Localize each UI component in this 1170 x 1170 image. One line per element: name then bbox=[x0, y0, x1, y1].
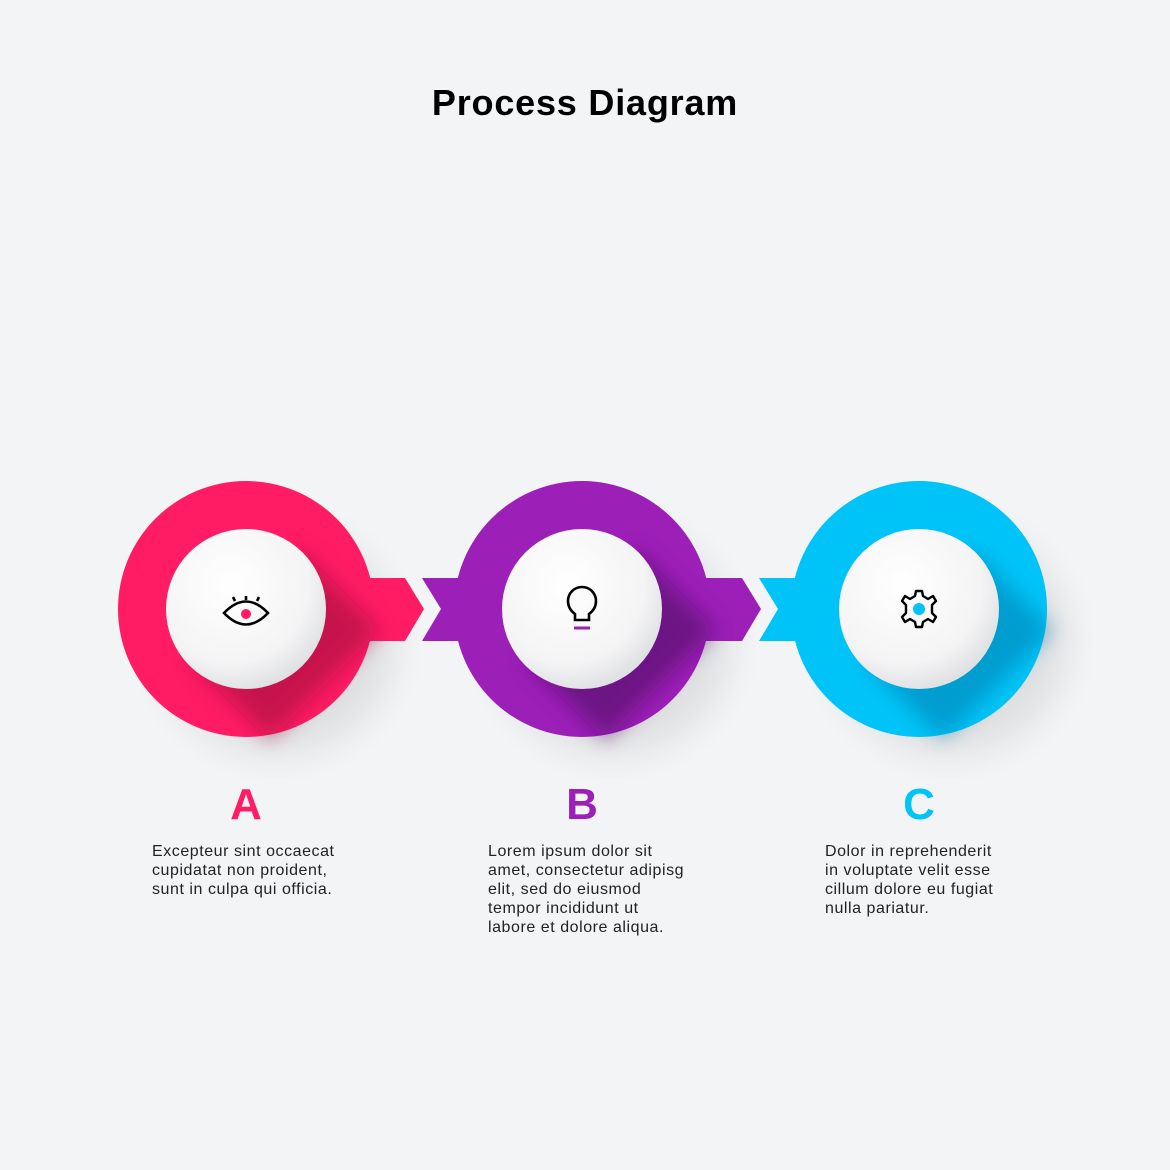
title: Process Diagram bbox=[432, 82, 738, 123]
label A: A bbox=[230, 780, 262, 829]
text B bbox=[488, 843, 684, 936]
text A bbox=[152, 843, 335, 898]
step C bbox=[759, 481, 1069, 755]
text C: nulla pariatur. bbox=[825, 900, 929, 917]
text C: Dolor in reprehenderit bbox=[825, 843, 992, 860]
text B: Lorem ipsum dolor sit bbox=[488, 843, 652, 860]
text C bbox=[825, 843, 993, 917]
text C: cillum dolore eu fugiat bbox=[825, 881, 993, 898]
icon: eye bbox=[224, 596, 268, 624]
step B bbox=[422, 481, 761, 755]
icon: gear bbox=[902, 591, 936, 627]
text A: Excepteur sint occaecat bbox=[152, 843, 335, 860]
text A: sunt in culpa qui officia. bbox=[152, 881, 332, 898]
text B: elit, sed do eiusmod bbox=[488, 881, 641, 898]
icon: light bulb bbox=[568, 587, 596, 620]
text C: in voluptate velit esse bbox=[825, 862, 991, 879]
label C: C bbox=[903, 780, 935, 829]
step A bbox=[118, 481, 424, 755]
text A: cupidatat non proident, bbox=[152, 862, 327, 879]
text B: tempor incididunt ut bbox=[488, 900, 639, 917]
text B: amet, consectetur adipisg bbox=[488, 862, 684, 879]
label B: B bbox=[566, 780, 598, 829]
text B: labore et dolore aliqua. bbox=[488, 919, 664, 936]
